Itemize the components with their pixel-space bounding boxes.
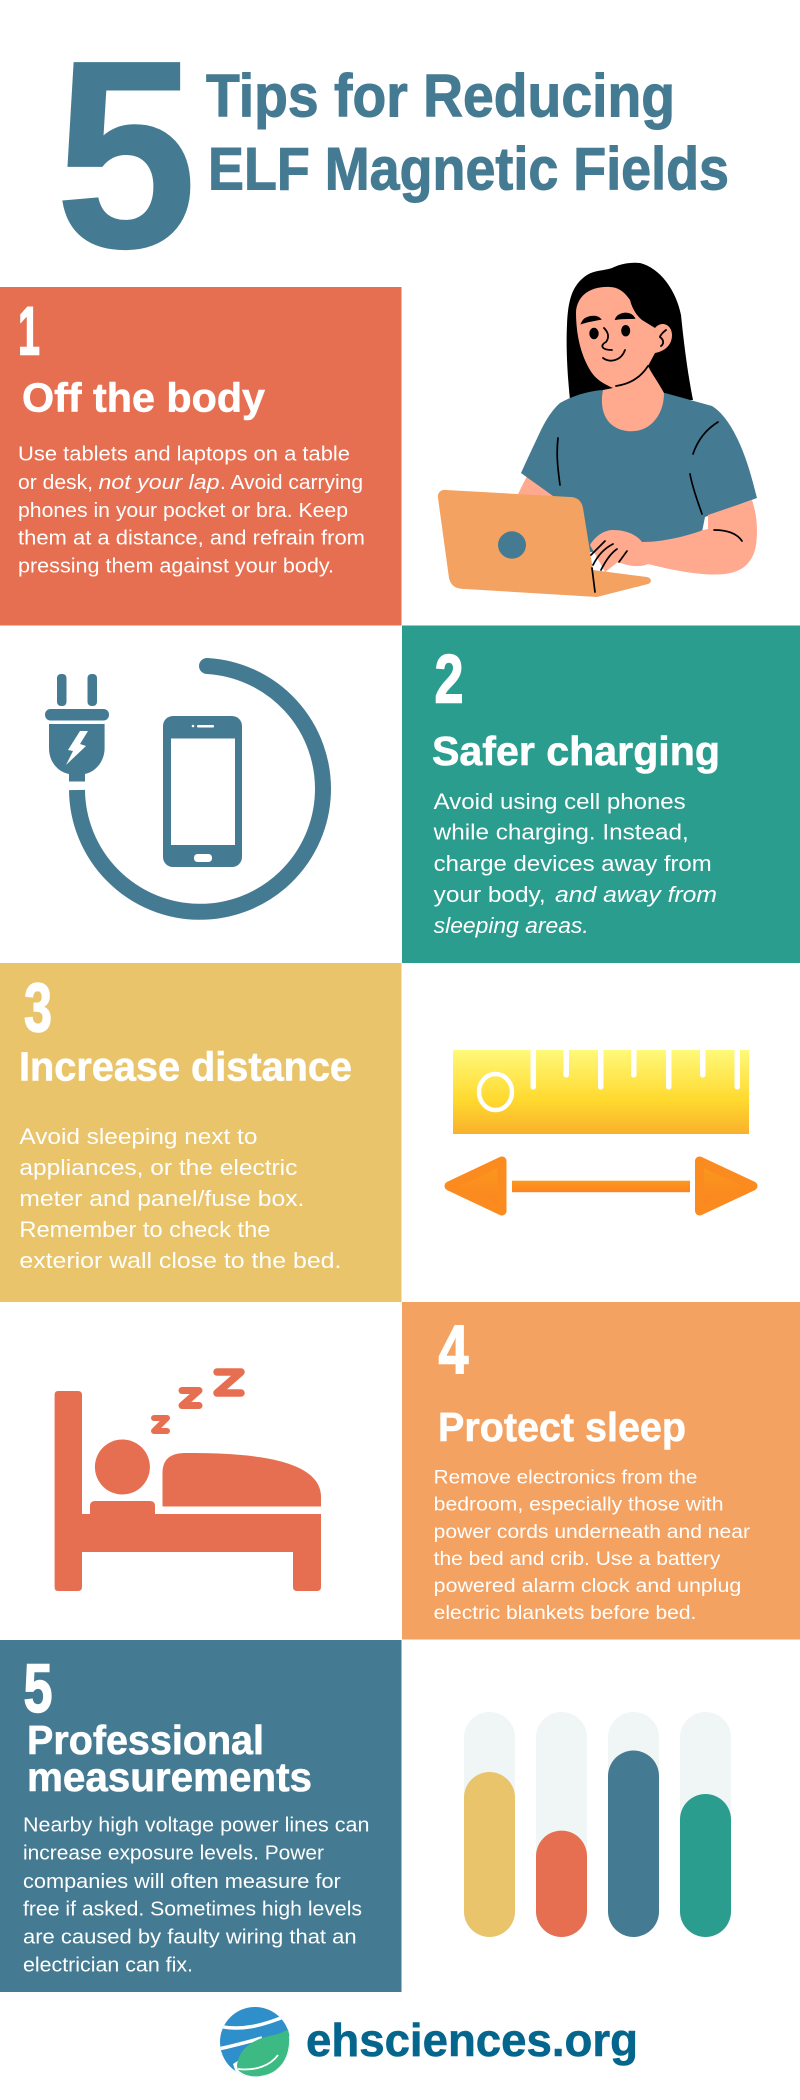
body text: meter and panel/fuse box. [19,1186,304,1211]
cord [77,658,323,912]
body text: the bed and crib. Use a battery [434,1549,721,1570]
body text: your body, [434,882,546,907]
body text: while charging. Instead, [433,820,689,845]
heading: Protect sleep [438,1404,686,1450]
body text: Avoid sleeping next to [19,1124,257,1149]
icon: person sleeping in bed [55,1372,321,1591]
body text: free if asked. Sometimes high levels [23,1898,362,1920]
hair [567,263,693,400]
bed frame [55,1391,321,1591]
number 1: 1 [18,293,40,370]
forearm and hand [590,500,757,575]
panel: tip 4 protect sleep [402,1302,800,1640]
body text: power cords underneath and near [434,1522,751,1543]
body text: Avoid using cell phones [434,789,686,814]
number 4: 4 [438,1311,468,1388]
sleeve and arm lines [557,422,742,592]
body text: Remember to check the [19,1217,270,1242]
body text [434,1468,751,1624]
body text: not your lap [98,471,220,494]
bar tracks [464,1712,731,1937]
footer logo and site name [220,2007,636,2077]
left arm [518,474,560,500]
body text: and away from [555,882,717,907]
title [55,4,729,304]
title line 2: ELF Magnetic Fields [208,136,729,202]
body text: sleeping areas. [434,913,589,938]
body text: charge devices away from [434,851,712,876]
body text: bedroom, especially those with [434,1495,724,1516]
body text: phones in your pocket or bra. Keep [18,499,348,522]
arrow: double-headed distance [449,1161,753,1211]
number 5: 5 [24,1650,52,1727]
body text: or desk, [18,471,93,494]
heading: Off the body [22,375,265,421]
title line 1: Tips for Reducing [206,62,675,130]
body text [19,1124,341,1273]
heading: measurements [27,1754,312,1800]
body text: Remove electronics from the [434,1468,697,1489]
number 3: 3 [24,969,52,1046]
body text [433,789,717,938]
site name: ehsciences.org [306,2014,638,2066]
heading [27,1717,312,1800]
body text: . Avoid carrying [220,471,363,494]
body text: appliances, or the electric [19,1155,297,1180]
body text: Nearby high voltage power lines can [23,1815,369,1837]
heading: Safer charging [432,728,720,774]
panel: tip 2 safer charging [402,626,800,963]
sleep z letters [154,1372,241,1431]
heading: Professional [27,1717,264,1763]
body text: exterior wall close to the bed. [19,1248,341,1273]
panel: tip 3 increase distance [0,963,402,1302]
shirt [521,390,757,554]
bar values [464,1750,731,1937]
body text: companies will often measure for [23,1871,341,1893]
body text: increase exposure levels. Power [23,1843,324,1865]
chart: four vertical pill bars [464,1712,731,1937]
number 2: 2 [434,641,464,718]
heading: Increase distance [19,1044,352,1090]
icon: woman with laptop [438,263,757,597]
panel: tip 1 off the body [0,287,402,626]
icon: plug and phone [45,658,323,912]
body text: electric blankets before bed. [434,1603,696,1624]
body text: them at a distance, and refrain from [18,527,365,550]
laptop [438,490,651,597]
icon: ruler [453,1044,749,1134]
facial features [582,314,666,386]
body text [23,1815,369,1976]
plug [45,674,109,782]
phone [163,716,242,867]
body text: Use tablets and laptops on a table [18,443,350,466]
icon: globe and leaf logo [220,2007,290,2077]
head [95,1440,150,1494]
neck and face [576,287,672,431]
body text: are caused by faulty wiring that an [23,1926,357,1948]
big numeral 5: 5 [55,4,197,304]
blanket [162,1453,321,1506]
laptop logo [498,531,526,559]
body text [18,443,365,578]
body text: electrician can fix. [23,1954,193,1976]
body text: pressing them against your body. [18,555,334,578]
body text: powered alarm clock and unplug [434,1576,741,1597]
panel: tip 5 professional measurements [0,1640,402,1992]
